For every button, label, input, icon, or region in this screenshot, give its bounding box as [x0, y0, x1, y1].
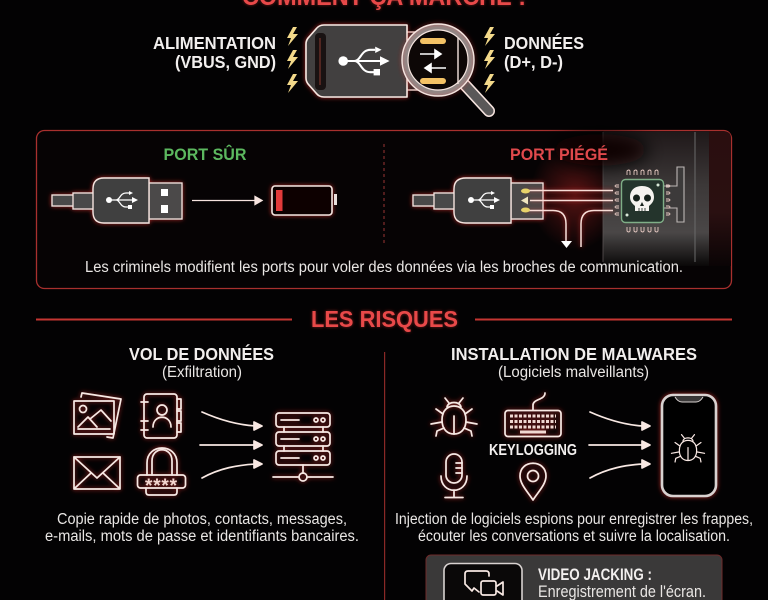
label: keylogging: KEYLOGGING	[489, 442, 577, 459]
safe port heading: PORT SÛR	[164, 145, 246, 164]
icon: battery	[272, 186, 337, 215]
icon: slot	[660, 167, 684, 222]
divider	[383, 144, 385, 245]
icon: malicious chip with skull	[615, 170, 670, 232]
icon: bug	[431, 398, 477, 436]
icon: screen recording	[444, 564, 522, 600]
heading: INSTALLATION DE MALWARES	[451, 344, 697, 364]
description	[45, 511, 359, 545]
label: alimentation: ALIMENTATION	[153, 33, 276, 53]
label: donnees	[504, 32, 584, 72]
icon: safe USB plug	[52, 178, 182, 223]
icon: envelope	[74, 457, 120, 489]
description: e-mails, mots de passe et identifiants bancaires.	[45, 528, 359, 545]
icon: server	[273, 413, 333, 481]
icon: trapped USB plug	[413, 178, 543, 223]
arrows: to phone	[589, 412, 650, 478]
label: alimentation	[153, 33, 276, 72]
heading: VOL DE DONNÉES	[129, 343, 274, 364]
callout text	[538, 566, 706, 600]
icon: location pin	[520, 463, 546, 500]
icon: USB connector with magnifier	[306, 24, 489, 111]
icon: left lightning bolts	[287, 27, 298, 93]
panel: malware installation	[395, 344, 753, 600]
icon: keyboard	[505, 393, 561, 436]
icon: microphone	[441, 454, 467, 498]
trapped port wall	[530, 132, 731, 266]
panel: data theft	[45, 343, 359, 545]
center divider	[384, 352, 385, 600]
caption: Les criminels modifient les ports pour voler des données via les broches de communication.	[85, 259, 683, 276]
icon: password lock: ****	[145, 476, 178, 497]
label: donnees: DONNÉES	[504, 32, 584, 53]
panel frame	[36, 130, 732, 288]
description	[395, 511, 753, 545]
trapped port heading: PORT PIÉGÉ	[510, 145, 608, 164]
data wires	[521, 188, 613, 248]
arrows: to server	[200, 412, 262, 478]
panel: port comparison	[36, 130, 732, 288]
subheading: (Logiciels malveillants)	[498, 364, 649, 381]
icon: right lightning bolts	[484, 27, 495, 93]
icon: infected phone	[662, 395, 716, 496]
icon: photos	[74, 393, 121, 438]
icon: contact book	[141, 394, 181, 438]
callout: video jacking	[426, 555, 722, 600]
panel: how it works diagram	[153, 24, 584, 111]
description: Copie rapide de photos, contacts, messages,	[57, 511, 347, 528]
label: alimentation: (VBUS, GND)	[175, 52, 276, 72]
icon: password lock	[138, 448, 186, 497]
subheading: (Exfiltration)	[162, 364, 242, 381]
description: écouter les conversations et suivre la localisation.	[418, 528, 730, 545]
heading: les risques: LES RISQUES	[311, 306, 458, 332]
arrow: charge	[192, 196, 262, 204]
label: donnees: (D+, D-)	[504, 52, 563, 72]
callout text: VIDEO JACKING :	[538, 566, 652, 584]
